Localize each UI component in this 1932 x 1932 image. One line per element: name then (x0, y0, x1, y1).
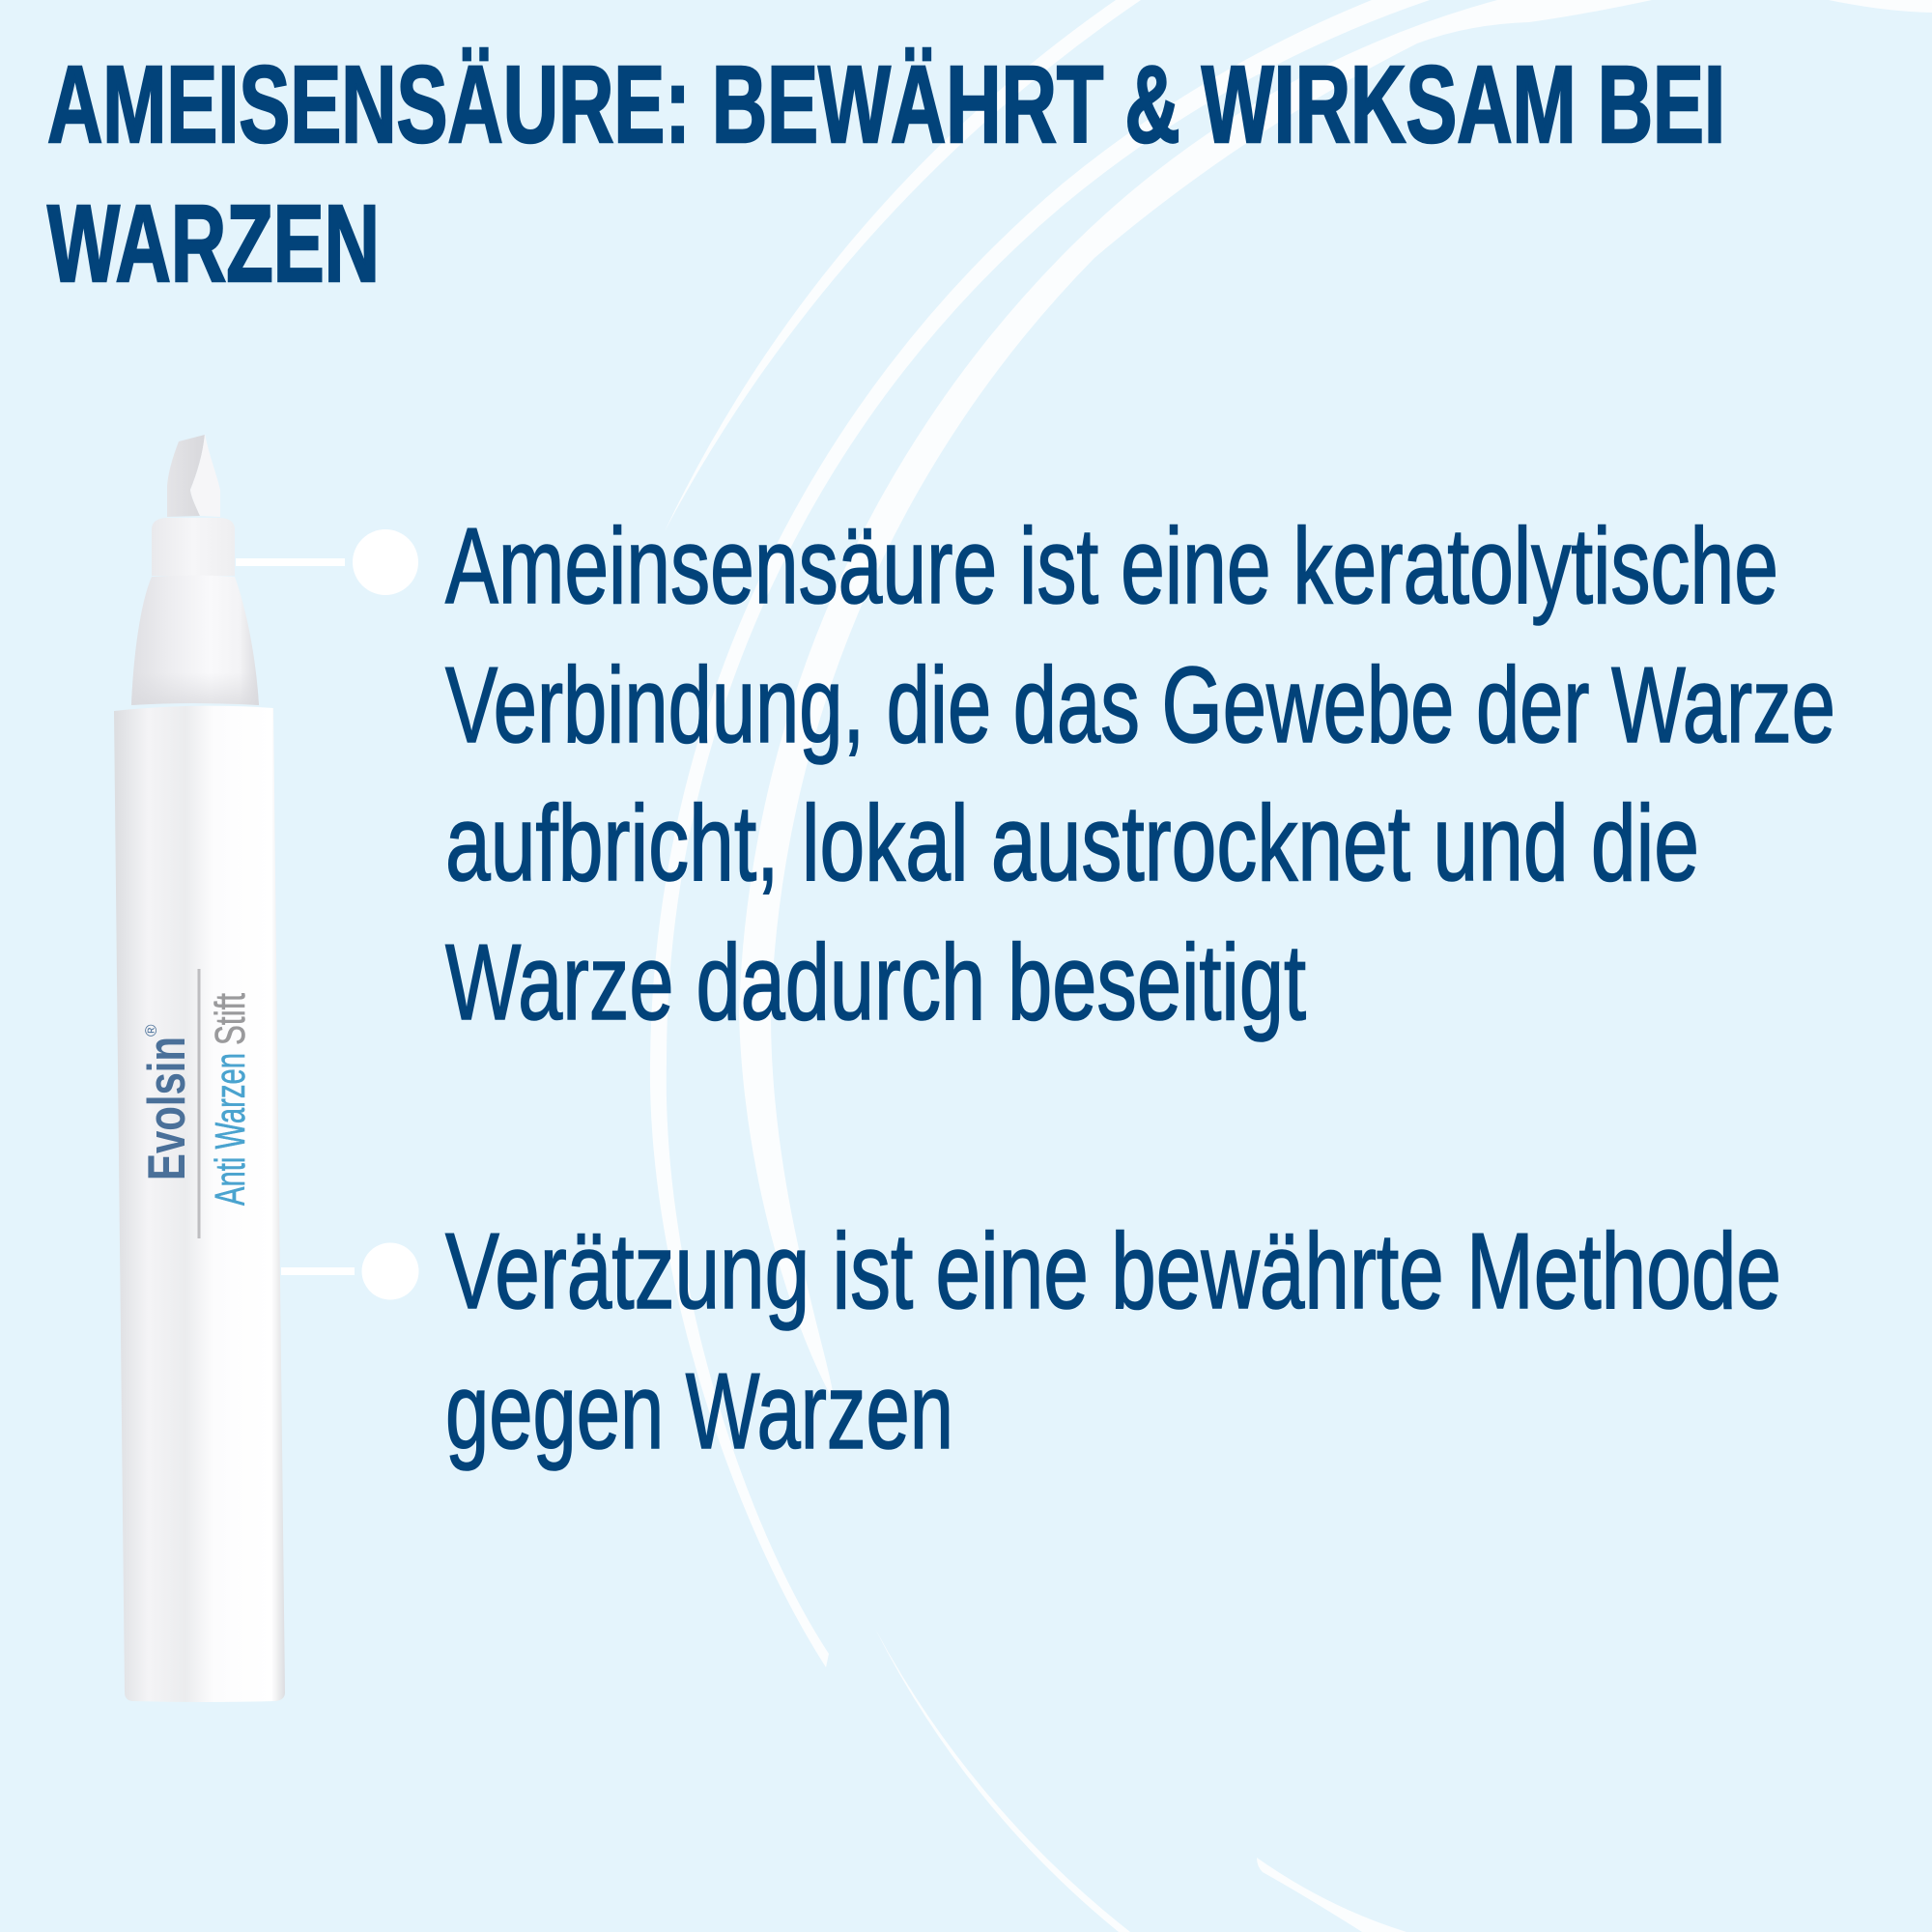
pen tip (167, 434, 220, 517)
label: Anti Warzen Stift: Anti Warzen (207, 1053, 254, 1206)
text block 1 (445, 506, 1835, 1042)
label: Evolsin: Evolsin (136, 1037, 196, 1180)
text block 1: Warze dadurch beseitigt (445, 923, 1306, 1042)
pen cone (131, 576, 259, 705)
connector line 2 (281, 1267, 355, 1275)
marker dot 1 (353, 529, 418, 595)
text block 2: gegen Warzen (445, 1351, 953, 1471)
marker dot 2 (361, 1242, 419, 1300)
label: Evolsin: ® (142, 1024, 160, 1037)
connector line 1 (236, 558, 345, 566)
text block 2 (445, 1211, 1781, 1471)
pen body (114, 706, 285, 1702)
title: WARZEN (47, 183, 380, 304)
label: Anti Warzen Stift: Stift (207, 993, 254, 1045)
label divider (197, 969, 201, 1238)
pen collar (152, 518, 235, 576)
title (47, 43, 1725, 304)
product pen illustration (114, 434, 285, 1702)
